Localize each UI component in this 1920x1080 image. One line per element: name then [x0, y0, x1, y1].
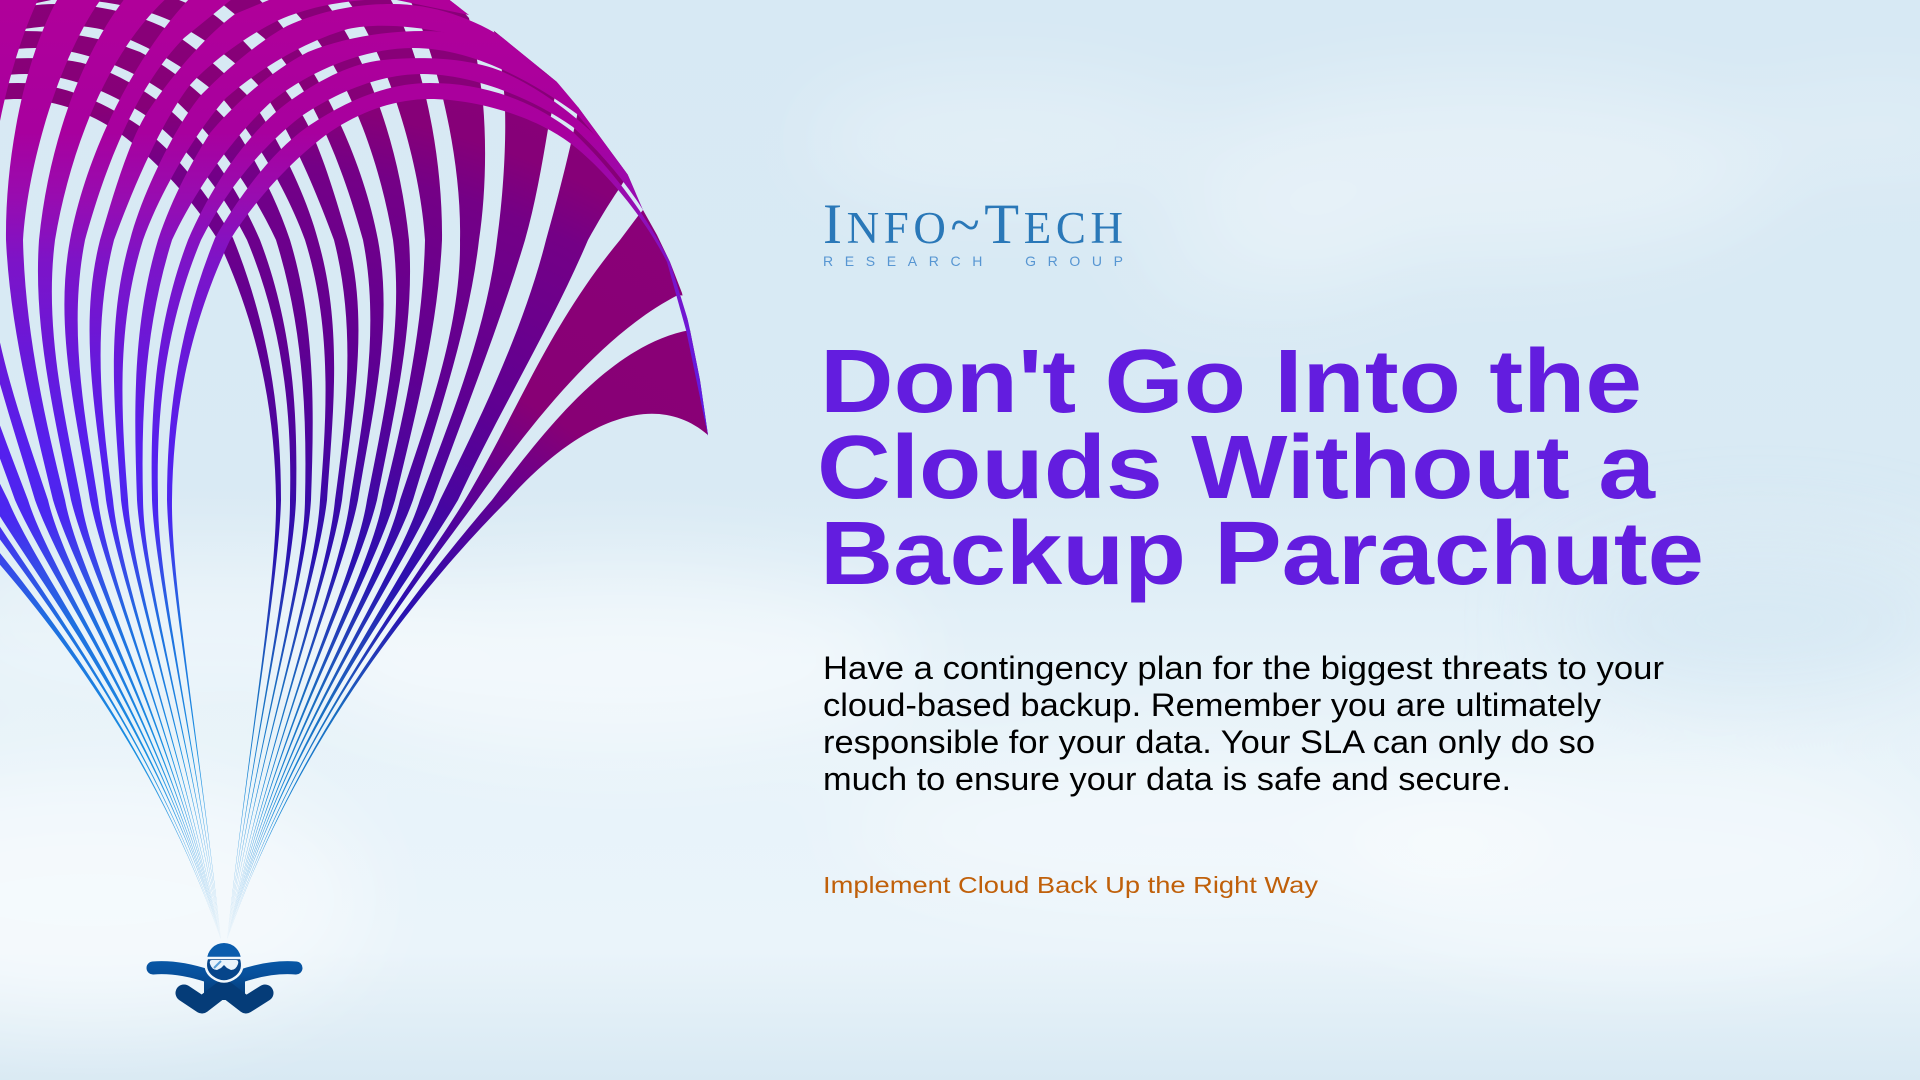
icon: skydiver — [153, 943, 296, 1005]
body text: cloud-based backup. Remember you are ultimately — [823, 687, 1601, 723]
helmet — [207, 943, 241, 960]
body text: responsible for your data. Your SLA can only do so — [823, 724, 1595, 760]
title — [817, 332, 1704, 604]
link text: Implement Cloud Back Up the Right Way — [823, 872, 1319, 898]
body text: Have a contingency plan for the biggest threats to your — [823, 650, 1664, 686]
parachute canopy and lines — [0, 0, 730, 940]
legs — [184, 988, 265, 1005]
title: Backup Parachute — [820, 504, 1704, 604]
face ring — [206, 958, 242, 982]
logo wordmark: INFO~TECH — [823, 193, 1123, 256]
left-hand ribbons, mirrored over the right set — [0, 0, 710, 940]
torso — [204, 974, 245, 1000]
goggles — [210, 960, 238, 970]
title: Don't Go Into the — [820, 332, 1642, 432]
logo: Info-Tech Research Group — [823, 193, 1123, 269]
body text: much to ensure your data is safe and secure. — [823, 761, 1511, 797]
title: Clouds Without a — [817, 418, 1656, 518]
arms — [153, 968, 296, 976]
right-hand ribbons — [0, 0, 730, 940]
logo sub-line: RESEARCH GROUP — [823, 253, 1123, 269]
body text — [823, 650, 1664, 797]
